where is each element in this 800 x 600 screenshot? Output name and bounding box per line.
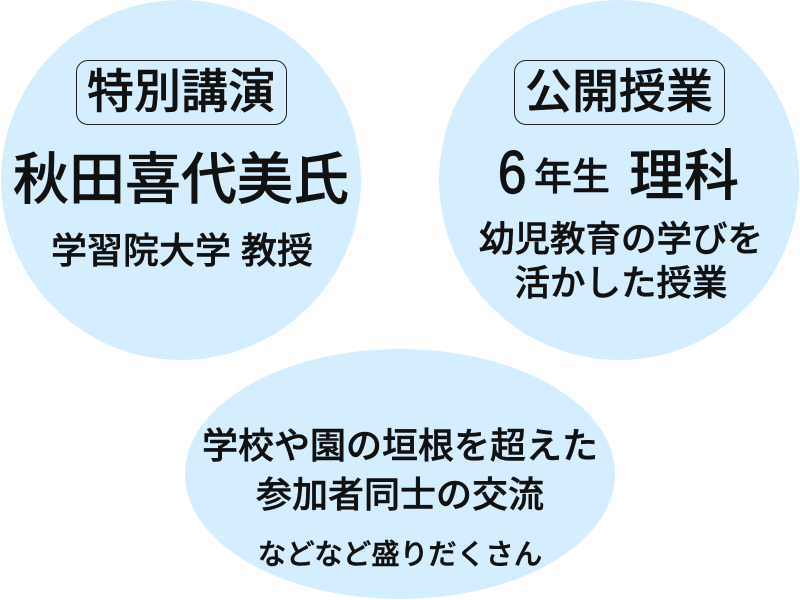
heading: special lecture: 特別講演 [87,65,275,118]
class subject: 年生 [534,157,610,199]
exchange description [202,425,598,515]
exchange description: 学校や園の垣根を超えた [202,425,598,466]
panel: open class circle [439,0,799,360]
badge: special lecture [76,60,287,125]
heading: open class: 公開授業 [525,65,713,118]
speaker title: 学習院大学 教授 [51,230,313,271]
speaker name: 秋田喜代美氏 [13,148,349,211]
class subject [498,139,739,207]
class subject: 6 [498,139,526,206]
class description [479,219,763,303]
panel: exchange ellipse [185,349,615,599]
badge: open class [514,60,725,125]
closing note: などなど盛りだくさん [258,539,542,571]
exchange description: 参加者同士の交流 [256,474,544,515]
panel: special lecture circle [1,0,361,360]
class subject: 理科 [629,145,739,207]
class description: 活かした授業 [514,263,728,303]
class description: 幼児教育の学びを [479,219,763,259]
